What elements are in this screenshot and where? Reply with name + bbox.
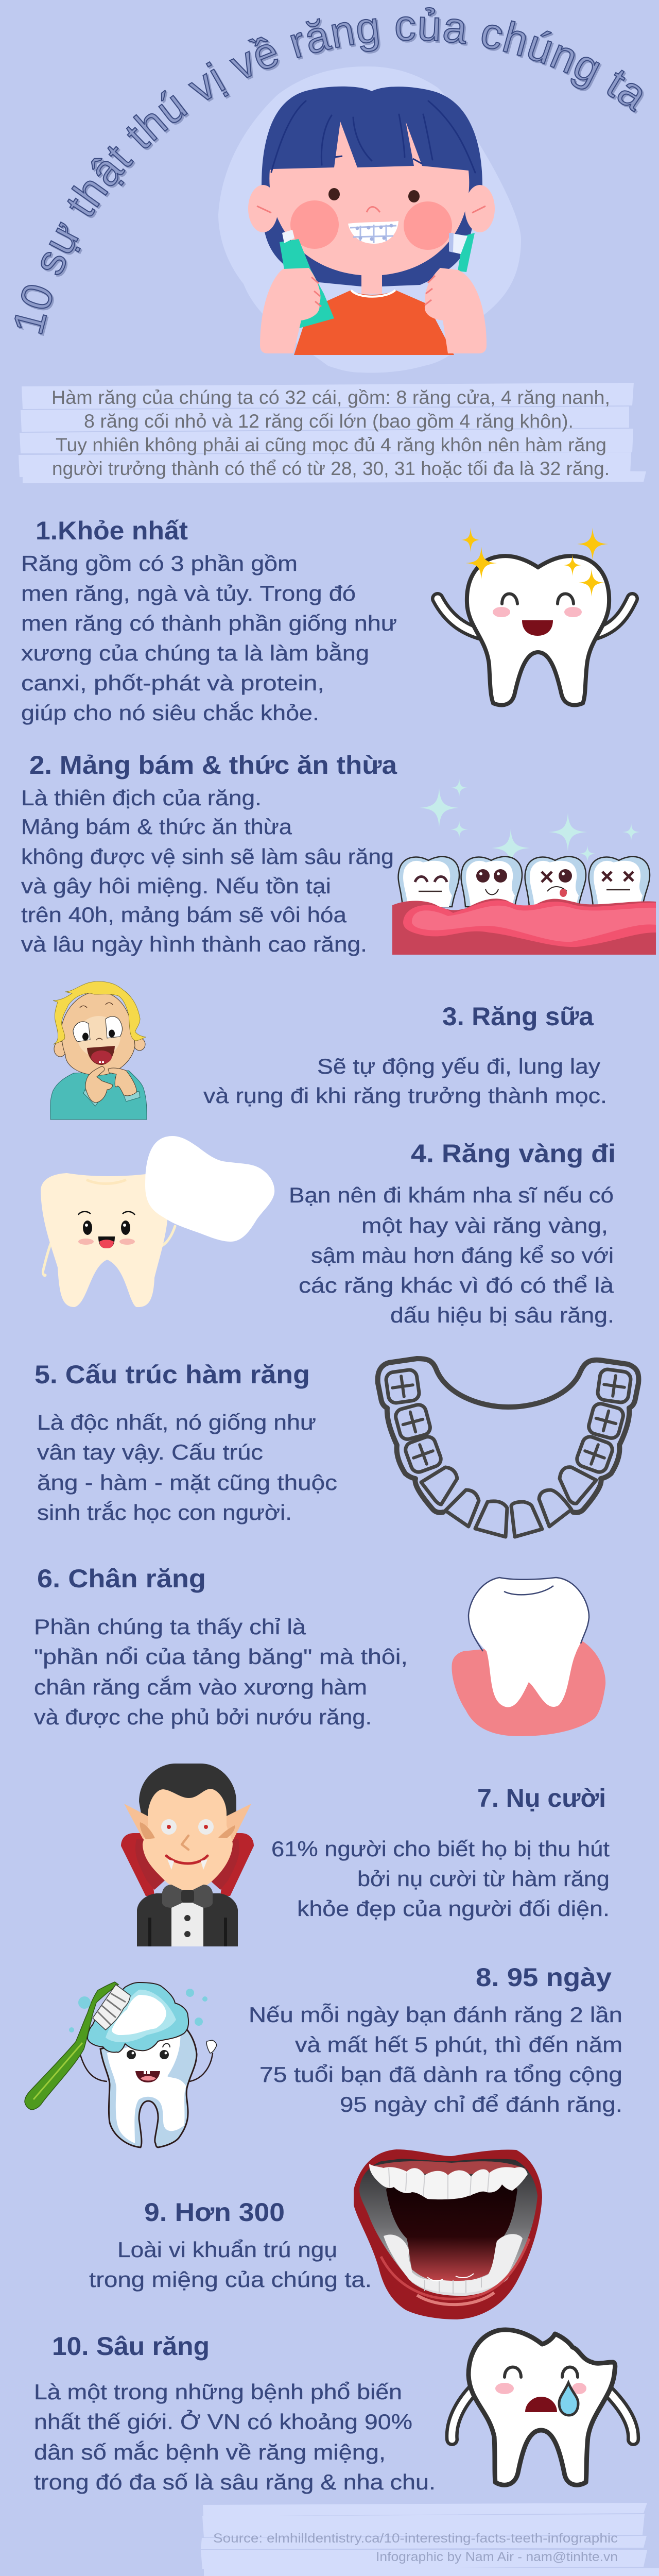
section 4: heading and text: 4. Răng vàng đi — [411, 1139, 616, 1168]
icon: dental jaw outline — [378, 1359, 638, 1537]
section 5: heading and text — [34, 1360, 337, 1524]
section 10: heading and text — [34, 2332, 436, 2494]
section 1: heading and text: giúp cho nó siêu chắc khỏe. — [21, 701, 319, 725]
section 9: heading and text: trong miệng của chúng ta. — [89, 2267, 372, 2292]
section 4: heading and text: một hay vài răng vàng, — [361, 1213, 608, 1238]
section 6: heading and text — [34, 1564, 408, 1729]
panel: intro text: Hàm răng của chúng ta có 32 cái, gồm: 8 răng cửa, 4 răng nanh, — [51, 387, 610, 408]
icon: yellow tooth with white tooth — [41, 1136, 274, 1307]
section 3: heading and text: 3. Răng sữa — [442, 1002, 594, 1031]
section 8: heading and text: 75 tuổi bạn đã dành ra tổng cộng — [259, 2062, 622, 2087]
panel: source credit — [201, 2503, 659, 2576]
section 6: heading and text: Phần chúng ta thấy chỉ là — [34, 1615, 306, 1639]
section 5: heading and text: Là độc nhất, nó giống như — [37, 1410, 316, 1434]
section 2: heading and text: và lâu ngày hình thành cao răng. — [21, 932, 367, 956]
section 4: heading and text: dấu hiệu bị sâu răng. — [390, 1303, 614, 1327]
panel: intro text — [19, 383, 646, 483]
section 10: heading and text: dân số mắc bệnh về răng miệng, — [34, 2440, 386, 2464]
panel: source credit: Infographic by Nam Air - nam@tinhte.vn — [376, 2550, 618, 2564]
icon: happy sparkling tooth — [438, 528, 632, 705]
section 2: heading and text: Mảng bám & thức ăn thừa — [21, 815, 292, 839]
section 5: heading and text: sinh trắc học con người. — [37, 1500, 292, 1524]
section 9: heading and text: Loài vi khuẩn trú ngụ — [117, 2238, 337, 2262]
section 1: heading and text: Răng gồm có 3 phần gồm — [21, 551, 298, 575]
section 1: heading and text: canxi, phốt-phát và protein, — [21, 671, 324, 695]
section 6: heading and text: "phần nổi của tảng băng" mà thôi, — [34, 1645, 408, 1669]
section 7: heading and text — [271, 1784, 610, 1921]
section 2: heading and text: và gây hôi miệng. Nếu tồn tại — [21, 874, 331, 898]
illustration: child with braces holding toothpaste and brush — [218, 66, 521, 373]
icon: row of teeth with gum — [392, 778, 656, 955]
section 4: heading and text — [289, 1139, 616, 1327]
section 8: heading and text: Nếu mỗi ngày bạn đánh răng 2 lần — [249, 2003, 622, 2027]
title: 10 sự thật thú vị về răng của chúng ta — [14, 7, 644, 336]
section 1: heading and text: 1.Khỏe nhất — [36, 516, 188, 545]
section 3: heading and text — [203, 1002, 607, 1108]
section 5: heading and text: vân tay vậy. Cấu trúc — [37, 1440, 263, 1464]
section 10: heading and text: trong đó đa số là sâu răng & nha chu. — [34, 2470, 436, 2494]
section 7: heading and text: bởi nụ cười từ hàm răng — [357, 1867, 610, 1891]
section 7: heading and text: khỏe đẹp của người đối diện. — [297, 1896, 610, 1921]
icon: open mouth with teeth — [354, 2149, 542, 2319]
icon: tooth brushing with foam — [25, 1982, 217, 2147]
section 2: heading and text — [21, 751, 397, 956]
panel: intro text: người trưởng thành có thể có từ 28, 30, 31 hoặc tối đa là 32 răng. — [52, 458, 610, 479]
section 10: heading and text: nhất thế giới. Ở VN có khoảng 90% — [34, 2409, 412, 2434]
section 10: heading and text: 10. Sâu răng — [52, 2332, 210, 2361]
section 2: heading and text: trên 40h, mảng bám sẽ vôi hóa — [21, 903, 347, 927]
section 8: heading and text: 95 ngày chỉ để đánh răng. — [340, 2092, 622, 2116]
icon: baby showing first teeth — [50, 981, 147, 1120]
section 6: heading and text: chân răng cắm vào xương hàm — [34, 1675, 367, 1699]
section 8: heading and text: 8. 95 ngày — [476, 1963, 612, 1992]
section 4: heading and text: Bạn nên đi khám nha sĩ nếu có — [289, 1183, 614, 1207]
section 1: heading and text: men răng, ngà và tủy. Trong đó — [21, 581, 356, 605]
section 2: heading and text: không được vệ sinh sẽ làm sâu răng — [21, 844, 394, 869]
section 5: heading and text: 5. Cấu trúc hàm răng — [34, 1360, 310, 1389]
section 9: heading and text: 9. Hơn 300 — [144, 2198, 285, 2227]
section 8: heading and text: và mất hết 5 phút, thì đến năm — [295, 2032, 622, 2057]
section 5: heading and text: ăng - hàm - mặt cũng thuộc — [37, 1470, 337, 1495]
section 1: heading and text: men răng có thành phần giống như — [21, 611, 397, 635]
panel: intro text: Tuy nhiên không phải ai cũng mọc đủ 4 răng khôn nên hàm răng — [56, 434, 606, 455]
section 8: heading and text — [249, 1963, 622, 2116]
section 4: heading and text: các răng khác vì đó có thể là — [299, 1273, 614, 1297]
section 3: heading and text: và rụng đi khi răng trưởng thành mọc. — [203, 1083, 607, 1108]
section 6: heading and text: 6. Chân răng — [37, 1564, 206, 1593]
panel: source credit: Source: elmhilldentistry.ca/10-interesting-facts-teeth-infographic — [213, 2531, 618, 2546]
section 1: heading and text — [21, 516, 397, 725]
section 4: heading and text: sậm màu hơn đáng kể so với — [311, 1243, 614, 1267]
icon: vampire — [121, 1764, 254, 1946]
section 3: heading and text: Sẽ tự động yếu đi, lung lay — [317, 1054, 600, 1078]
icon: crying chipped tooth — [452, 2330, 633, 2485]
section 2: heading and text: 2. Mảng bám & thức ăn thừa — [29, 751, 397, 779]
section 9: heading and text — [89, 2198, 372, 2292]
section 1: heading and text: xương của chúng ta là làm bằng — [21, 641, 369, 665]
icon: tooth root in gum — [452, 1578, 605, 1736]
section 7: heading and text: 61% người cho biết họ bị thu hút — [271, 1837, 610, 1861]
section 2: heading and text: Là thiên địch của răng. — [21, 786, 262, 810]
section 6: heading and text: và được che phủ bởi nướu răng. — [34, 1705, 372, 1729]
panel: intro text: 8 răng cối nhỏ và 12 răng cối lớn (bao gồm 4 răng khôn). — [84, 411, 574, 432]
section 10: heading and text: Là một trong những bệnh phổ biến — [34, 2380, 402, 2404]
section 7: heading and text: 7. Nụ cười — [477, 1784, 606, 1812]
